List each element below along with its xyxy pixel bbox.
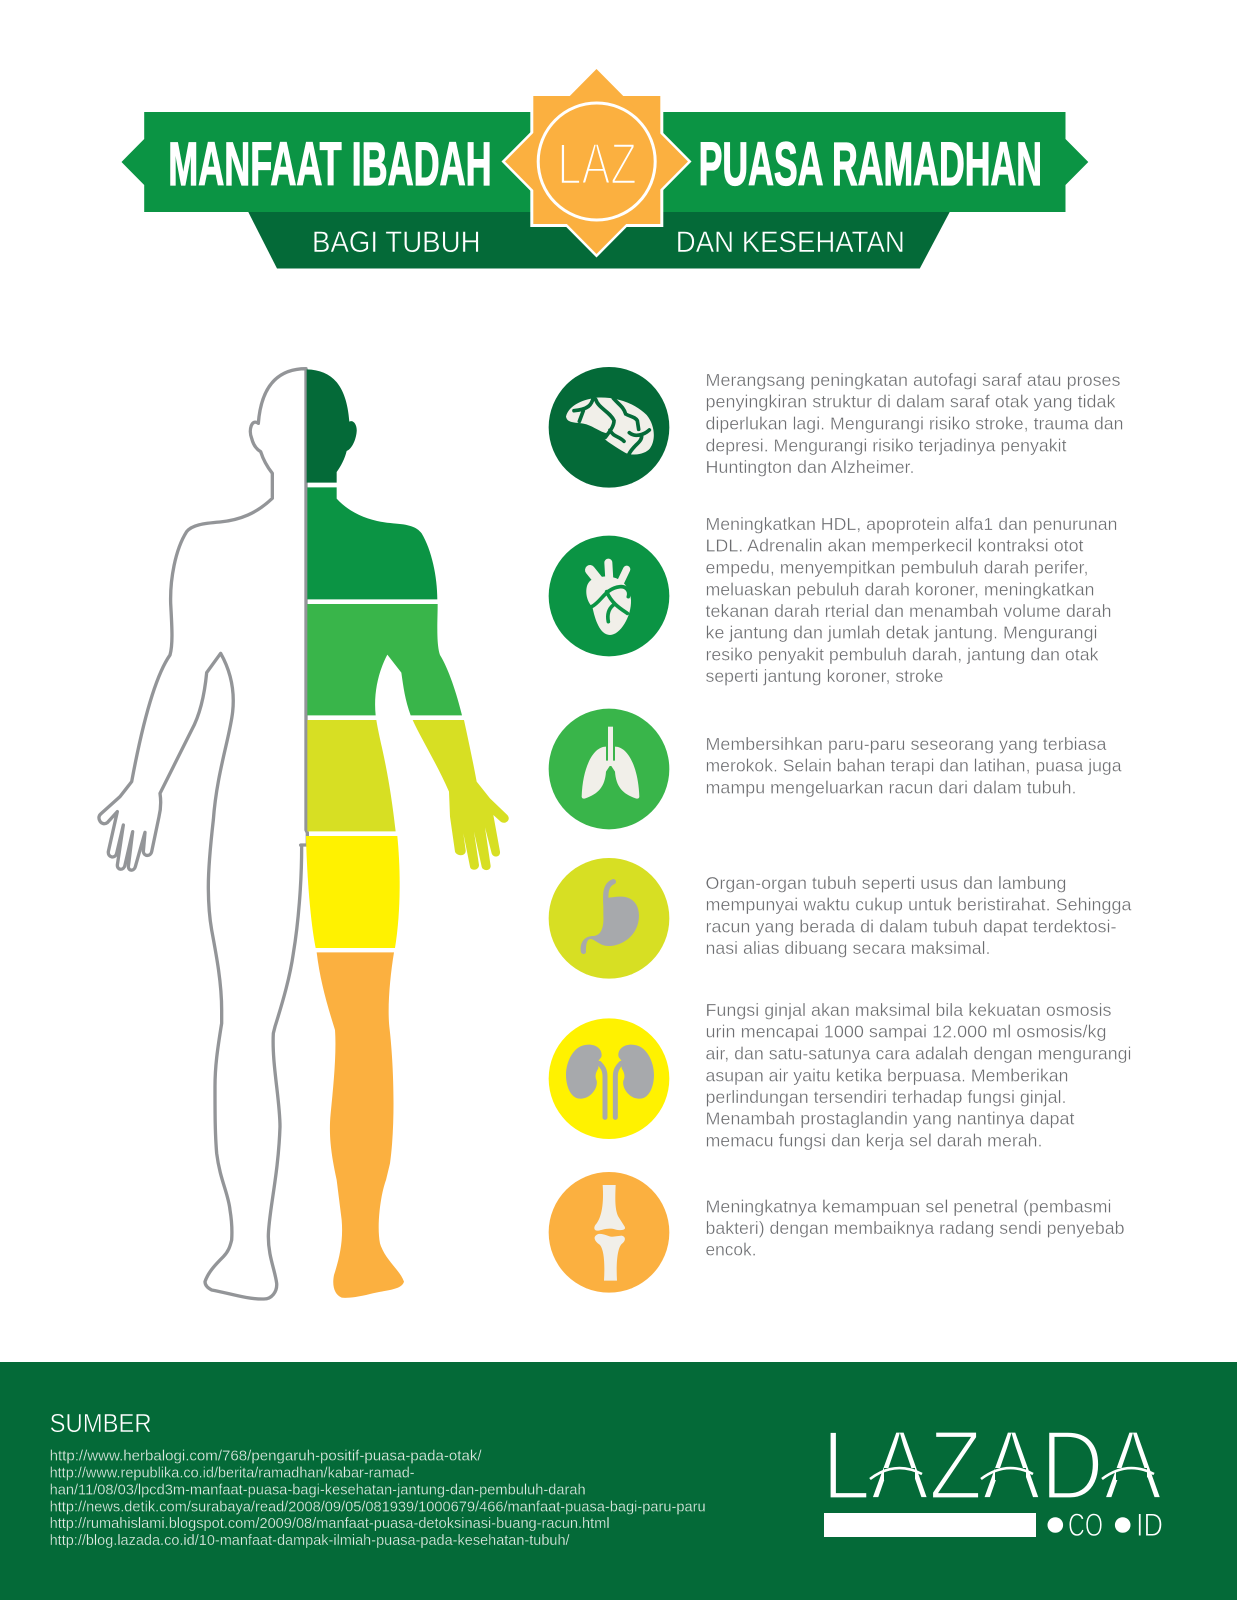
text: stomach benefit: racun yang berada di dalam tubuh dapat terdektosi- (706, 916, 1117, 936)
sources list: http://blog.lazada.co.id/10-manfaat-dampak-ilmiah-puasa-pada-kesehatan-tubuh/ (50, 1533, 571, 1549)
head segment (307, 369, 357, 483)
text: brain benefit: penyingkiran struktur di dalam saraf otak yang tidak (706, 392, 1116, 412)
hip segment (306, 836, 400, 948)
text: lungs benefit: merokok. Selain bahan terapi dan latihan, puasa juga (706, 756, 1122, 776)
chest segment (307, 487, 437, 599)
body outline left half (99, 369, 307, 1299)
footer panel (0, 1362, 1237, 1600)
text: heart benefit: tekanan darah rterial dan menambah volume darah (706, 601, 1112, 621)
text: heart benefit: empedu, menyempitkan pembuluh darah perifer, (706, 557, 1088, 577)
Lazada logo: LAZADA (822, 1410, 1163, 1520)
sources list: http://rumahislami.blogspot.com/2009/08/manfaat-puasa-detoksinasi-buang-racun.html (50, 1516, 610, 1532)
icon: stomach (549, 858, 669, 979)
text: joint benefit: encok. (706, 1240, 756, 1260)
text: brain benefit: depresi. Mengurangi risiko terjadinya penyakit (706, 435, 1067, 455)
dark green subtitle ribbon (248, 212, 950, 268)
title left: MANFAAT IBADAH (168, 130, 492, 199)
sources list: http://www.republika.co.id/berita/ramadhan/kabar-ramad- (50, 1465, 415, 1481)
text: kidney benefit: air, dan satu-satunya cara adalah dengan mengurangi (706, 1044, 1132, 1064)
text: joint benefit: bakteri) dengan membaiknya radang sendi penyebab (706, 1218, 1124, 1238)
text: brain benefit: diperlukan lagi. Mengurangi risiko stroke, trauma dan (706, 414, 1124, 434)
waist segment (307, 720, 396, 831)
LAZ logo text: LAZ (557, 132, 637, 197)
text: stomach benefit (706, 873, 1132, 958)
sources list: http://www.herbalogi.com/768/pengaruh-positif-puasa-pada-otak/ (50, 1449, 483, 1465)
forearm and hand segment (413, 720, 509, 870)
text: lungs benefit: Membersihkan paru-paru seseorang yang terbiasa (706, 734, 1107, 754)
text: brain benefit: Huntington dan Alzheimer. (706, 457, 914, 477)
text: heart benefit: Meningkatkan HDL, apoprotein alfa1 dan penurunan (706, 514, 1118, 534)
sources heading: SUMBER (50, 1408, 152, 1438)
text: stomach benefit: mempunyai waktu cukup untuk beristirahat. Sehingga (706, 895, 1132, 915)
text: kidney benefit: perlindungan tersendiri terhadap fungsi ginjal. (706, 1087, 1066, 1107)
text: heart benefit: resiko penyakit pembuluh darah, jantung dan otak (706, 644, 1099, 664)
body figure (99, 369, 509, 1299)
icon: lungs (549, 709, 669, 829)
text: joint benefit: Meningkatnya kemampuan sel penetral (pembasmi (706, 1196, 1112, 1216)
Lazada logo: CO (1068, 1507, 1103, 1543)
text: brain benefit: Merangsang peningkatan autofagi saraf atau proses (706, 370, 1121, 390)
text: lungs benefit: mampu mengeluarkan racun dari dalam tubuh. (706, 777, 1076, 797)
subtitle right: DAN KESEHATAN (676, 226, 905, 259)
text: joint benefit (706, 1196, 1124, 1260)
text: kidney benefit: asupan air yaitu ketika berpuasa. Memberikan (706, 1065, 1068, 1085)
leg segment (317, 952, 404, 1298)
icon: brain (549, 367, 669, 488)
text: stomach benefit: Organ-organ tubuh seperti usus dan lambung (706, 873, 1066, 893)
text: brain benefit (706, 370, 1124, 477)
sources list: han/11/08/03/lpcd3m-manfaat-puasa-bagi-kesehatan-jantung-dan-pembuluh-darah (50, 1482, 586, 1498)
text: kidney benefit: Fungsi ginjal akan maksimal bila kekuatan osmosis (706, 1000, 1112, 1020)
text: lungs benefit (706, 734, 1122, 797)
green title ribbon (122, 112, 1088, 212)
text: stomach benefit: nasi alias dibuang secara maksimal. (706, 938, 990, 958)
sources list (50, 1449, 706, 1549)
text: heart benefit (706, 514, 1118, 686)
text: heart benefit: LDL. Adrenalin akan memperkecil kontraksi otot (706, 536, 1084, 556)
icon: heart (549, 536, 669, 656)
subtitle left: BAGI TUBUH (312, 226, 481, 259)
sources list: http://news.detik.com/surabaya/read/2008/09/05/081939/1000679/466/manfaat-puasa-bagi-paru-paru (50, 1499, 706, 1515)
text: heart benefit: seperti jantung koroner, stroke (706, 666, 944, 686)
Lazada logo: ID (1136, 1507, 1163, 1543)
abdomen and upper arm segment (307, 604, 462, 715)
text: heart benefit: meluaskan pebuluh darah koroner, meningkatkan (706, 579, 1094, 599)
text: kidney benefit: Menambah prostaglandin yang nantinya dapat (706, 1109, 1075, 1129)
text: kidney benefit: urin mencapai 1000 sampai 12.000 ml osmosis/kg (706, 1022, 1106, 1042)
icon: knee joint (549, 1172, 669, 1293)
text: heart benefit: ke jantung dan jumlah detak jantung. Mengurangi (706, 623, 1098, 643)
text: kidney benefit: memacu fungsi dan kerja sel darah merah. (706, 1131, 1042, 1151)
header banner (122, 69, 1088, 268)
icon: kidneys (549, 1018, 669, 1139)
star emblem (505, 69, 688, 254)
text: kidney benefit (706, 1000, 1132, 1151)
